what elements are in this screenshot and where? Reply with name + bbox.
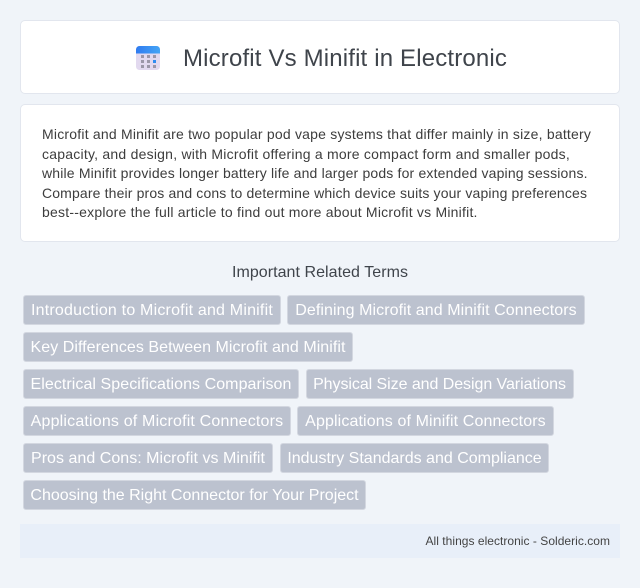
text block: summary paragraph: best--explore the full article to find out more about Microfit vs Minifit. (42, 204, 478, 220)
tag: pros and cons: Pros and Cons: Microfit vs Minifit (31, 450, 265, 467)
text block: summary paragraph: Compare their pros and cons to determine which device suits your vaping preferences (42, 185, 587, 201)
tag: key differences (23, 332, 353, 362)
tag: physical size: Physical Size and Design Variations (313, 376, 566, 393)
tag: microfit applications (23, 406, 291, 436)
tag: electrical specifications: Electrical Specifications Comparison (31, 376, 291, 393)
text block: summary paragraph: while Minifit provides longer battery life and larger pods for extended vaping sessions. (42, 165, 588, 181)
panel: term tags (23, 295, 585, 510)
tag: minifit applications (297, 406, 554, 436)
tag: defining connectors (287, 295, 585, 325)
icon: calculator app (136, 46, 160, 70)
text block: summary paragraph: Microfit and Minifit are two popular pod vape systems that differ mainly in size, battery (42, 126, 591, 142)
tag: key differences: Key Differences Between Microfit and Minifit (31, 339, 345, 356)
tag: minifit applications: Applications of Minifit Connectors (305, 413, 546, 430)
panel: summary (20, 104, 620, 242)
tag: choosing connector (23, 480, 366, 510)
tag: industry standards: Industry Standards and Compliance (287, 450, 542, 467)
tag: industry standards (280, 443, 549, 473)
tag: choosing connector: Choosing the Right Connector for Your Project (30, 487, 359, 504)
heading: important related terms: Important Related Terms (232, 264, 408, 281)
footer credit: All things electronic - Solderic.com (426, 534, 610, 548)
title: Microfit Vs Minifit in Electronic (183, 45, 507, 72)
tag: electrical specifications (23, 369, 299, 399)
footer bar (20, 524, 620, 558)
tag: microfit applications: Applications of Microfit Connectors (31, 413, 283, 430)
text block: summary paragraph: capacity, and design, with Microfit offering a more compact form and smaller pods, (42, 146, 570, 162)
tag: introduction (23, 295, 281, 325)
text block: summary paragraph (42, 126, 591, 220)
tag: physical size (306, 369, 574, 399)
panel: title header (20, 20, 620, 94)
tag: defining connectors: Defining Microfit and Minifit Connectors (295, 302, 577, 319)
tag: introduction: Introduction to Microfit and Minifit (31, 302, 273, 319)
tag: pros and cons (23, 443, 273, 473)
